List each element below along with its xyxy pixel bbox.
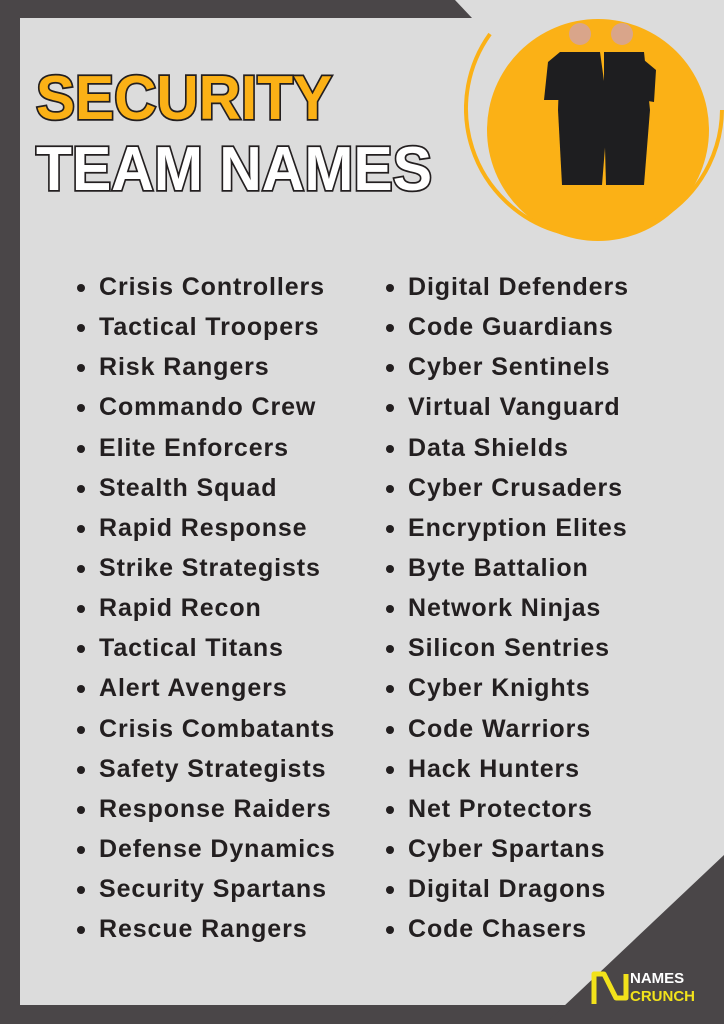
list: right column: Encryption Elites [408, 514, 628, 542]
icon: two guards [544, 23, 656, 185]
logo: names crunch: NAMES [630, 970, 684, 987]
title [35, 64, 432, 204]
list: right column: Cyber Crusaders [408, 474, 623, 502]
logo: names crunch [592, 970, 695, 1005]
list: left column: Risk Rangers [99, 353, 270, 381]
list: left column: Defense Dynamics [99, 835, 336, 863]
list: right column: Virtual Vanguard [408, 393, 621, 421]
logo: names crunch: CRUNCH [630, 988, 695, 1005]
list: left column: Response Raiders [99, 795, 332, 823]
list: right column: Digital Defenders [408, 273, 629, 301]
list: right column: Cyber Knights [408, 674, 591, 702]
list: right column: Net Protectors [408, 795, 593, 823]
list: left column: Tactical Titans [99, 634, 284, 662]
list: right column: Digital Dragons [408, 875, 606, 903]
list: right column: Data Shields [408, 434, 569, 462]
list: left column: Rapid Response [99, 514, 307, 542]
list: left column: Rescue Rangers [99, 915, 308, 943]
list: left column: Elite Enforcers [99, 434, 289, 462]
title: TEAM NAMES [36, 135, 432, 204]
list: left column: Rapid Recon [99, 594, 262, 622]
list: left column: Safety Strategists [99, 755, 326, 783]
list: right column: Silicon Sentries [408, 634, 610, 662]
list: right column: Code Warriors [408, 715, 591, 743]
list: right column: Network Ninjas [408, 594, 601, 622]
list: left column: Strike Strategists [99, 554, 321, 582]
list: left column: Commando Crew [99, 393, 316, 421]
list: left column: Alert Avengers [99, 674, 288, 702]
list: right column: Code Guardians [408, 313, 614, 341]
list: right column [386, 273, 629, 943]
list: left column [77, 273, 336, 943]
list: right column: Hack Hunters [408, 755, 580, 783]
image circle with guards [464, 19, 724, 241]
list: left column: Tactical Troopers [99, 313, 319, 341]
list: left column: Crisis Combatants [99, 715, 335, 743]
list: right column: Cyber Spartans [408, 835, 605, 863]
list: right column: Byte Battalion [408, 554, 589, 582]
list: right column: Code Chasers [408, 915, 587, 943]
list: left column: Security Spartans [99, 875, 327, 903]
list: right column: Cyber Sentinels [408, 353, 610, 381]
list: left column: Stealth Squad [99, 474, 277, 502]
list: left column: Crisis Controllers [99, 273, 325, 301]
title: SECURITY [36, 64, 332, 133]
